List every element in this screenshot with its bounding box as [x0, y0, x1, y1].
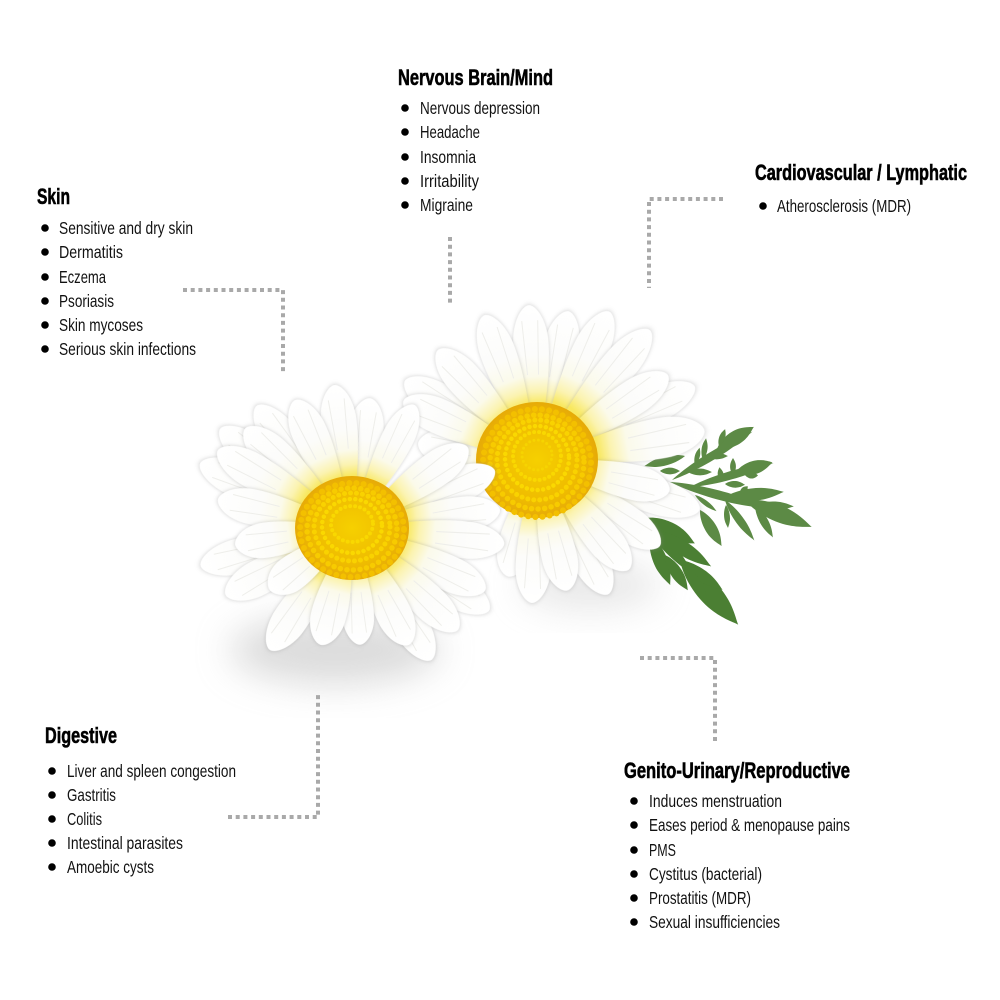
list: digestive symptoms: Amoebic cysts — [67, 857, 154, 877]
panel: genito-urinary/reproductive — [624, 758, 850, 932]
list: genito-urinary symptoms: Cystitus (bacterial) — [649, 864, 762, 884]
list: digestive symptoms: Gastritis — [67, 785, 116, 805]
list: digestive symptoms — [48, 761, 236, 877]
list: digestive symptoms: Liver and spleen congestion — [67, 761, 236, 781]
list: nervous symptoms — [401, 98, 540, 215]
heading: genito-urinary/reproductive: Genito-Urinary/Reproductive — [624, 758, 850, 783]
list: genito-urinary symptoms — [630, 791, 850, 932]
list: skin symptoms: Dermatitis — [59, 242, 123, 262]
heading: nervous brain/mind: Nervous Brain/Mind — [398, 65, 553, 90]
list: genito-urinary symptoms: Prostatitis (MDR) — [649, 888, 751, 908]
heading: skin: Skin — [37, 184, 70, 209]
list: digestive symptoms: Intestinal parasites — [67, 833, 183, 853]
list: nervous symptoms: Headache — [420, 122, 480, 142]
list: nervous symptoms: Irritability — [420, 171, 479, 191]
list: skin symptoms: Serious skin infections — [59, 339, 196, 359]
connector: digestive — [228, 695, 318, 817]
panel: digestive — [45, 723, 236, 877]
list: genito-urinary symptoms: Eases period & menopause pains — [649, 815, 850, 835]
list: nervous symptoms: Insomnia — [420, 147, 476, 167]
list: genito-urinary symptoms: Induces menstruation — [649, 791, 782, 811]
list: nervous symptoms: Migraine — [420, 195, 473, 215]
panel: nervous brain/mind — [398, 65, 553, 215]
list: skin symptoms: Skin mycoses — [59, 315, 143, 335]
list: skin symptoms: Eczema — [59, 267, 106, 287]
icon: right daisy flower — [396, 304, 708, 604]
connector: skin — [183, 290, 283, 373]
list: cardiovascular symptoms: Atherosclerosis (MDR) — [777, 196, 911, 216]
connector: genito-urinary — [640, 658, 715, 741]
list: genito-urinary symptoms: PMS — [649, 840, 676, 860]
list: skin symptoms: Psoriasis — [59, 291, 114, 311]
list: nervous symptoms: Nervous depression — [420, 98, 540, 118]
heading: digestive: Digestive — [45, 723, 117, 748]
soft shadows under flowers — [230, 561, 660, 684]
panel: cardiovascular / lymphatic — [755, 160, 967, 216]
connector: cardiovascular — [649, 199, 723, 288]
list: genito-urinary symptoms: Sexual insufficiencies — [649, 912, 780, 932]
list: skin symptoms: Sensitive and dry skin — [59, 218, 193, 238]
list: cardiovascular symptoms — [759, 196, 911, 216]
panel: skin — [37, 184, 196, 359]
upper frond — [643, 421, 815, 549]
icon: left daisy flower — [193, 383, 506, 669]
icon: chamomile leaves — [633, 421, 815, 632]
list: skin symptoms — [41, 218, 196, 359]
list: digestive symptoms: Colitis — [67, 809, 102, 829]
connector: nervous — [448, 237, 452, 305]
lower frond — [633, 508, 747, 632]
